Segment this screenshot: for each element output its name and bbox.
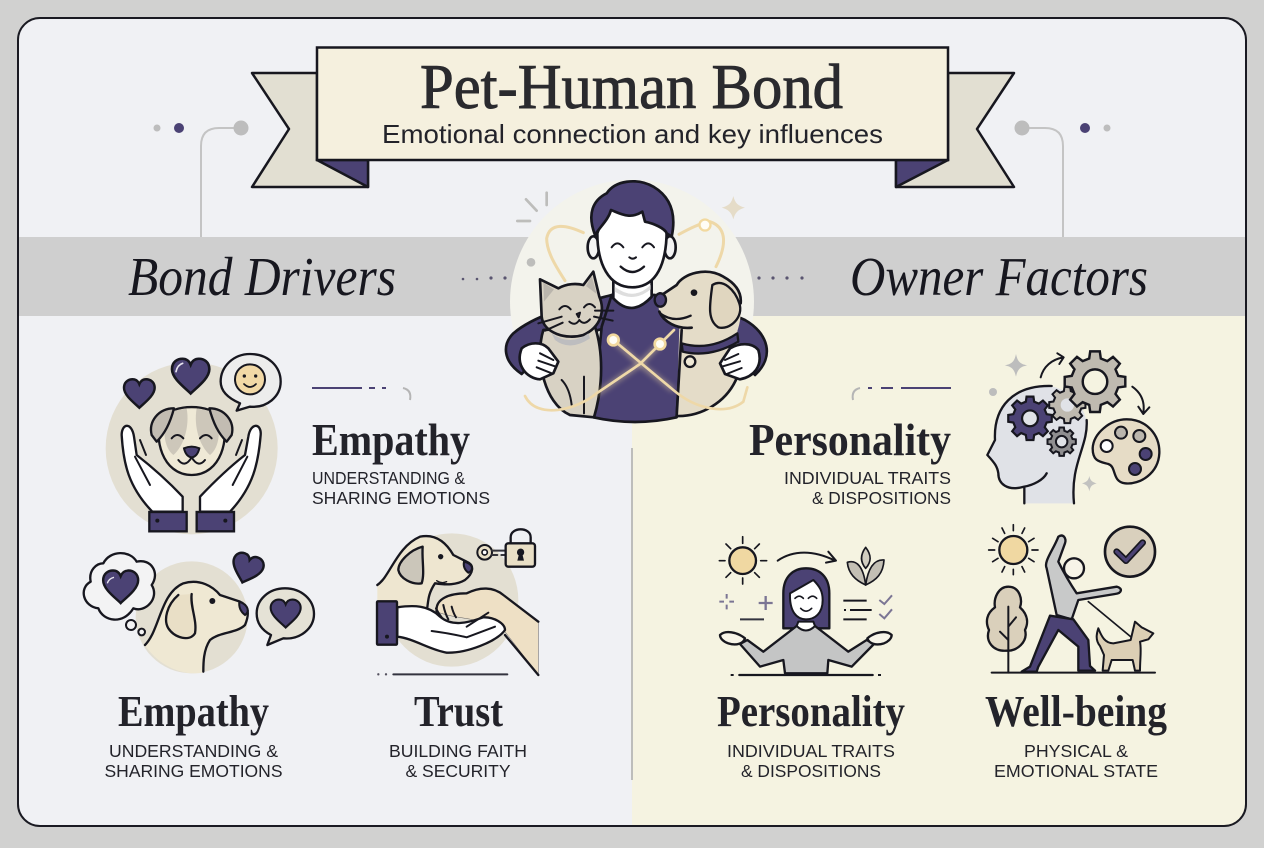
dotted leaders	[462, 276, 804, 280]
heading: Bond Drivers: Bond Drivers	[128, 246, 396, 307]
text: personality top: INDIVIDUAL TRAITS	[784, 468, 951, 488]
icon: well-being person walking dog	[987, 525, 1155, 673]
text: empathy bottom: UNDERSTANDING &	[109, 741, 278, 761]
icon: head with gears and palette	[987, 351, 1159, 503]
icon: woman balancing with sun and plant	[719, 537, 892, 675]
icon: empathy dog in hands	[106, 354, 281, 534]
text: personality top: & DISPOSITIONS	[812, 488, 951, 508]
text: well-being	[985, 687, 1167, 781]
title: Pet-Human Bond	[420, 52, 843, 122]
text: well-being: PHYSICAL &	[1024, 741, 1128, 761]
text: trust: Trust	[414, 687, 503, 736]
text: well-being: EMOTIONAL STATE	[994, 761, 1158, 781]
text: empathy top: SHARING EMOTIONS	[312, 488, 490, 508]
subtitle: Emotional connection and key influences	[382, 119, 883, 149]
ribbon banner	[252, 48, 1014, 187]
text: empathy top: UNDERSTANDING &	[312, 468, 465, 488]
text: trust: BUILDING FAITH	[389, 741, 527, 761]
text: personality top: Personality	[749, 415, 951, 465]
text: empathy bottom	[104, 687, 282, 781]
text: personality bottom: Personality	[717, 687, 905, 736]
connector left	[154, 120, 248, 237]
text: empathy top: Empathy	[312, 415, 470, 465]
heading: Owner Factors: Owner Factors	[850, 246, 1148, 307]
text: personality bottom	[717, 687, 905, 781]
text: empathy bottom: Empathy	[118, 687, 269, 736]
text: empathy top	[312, 415, 490, 508]
text: personality bottom: & DISPOSITIONS	[741, 761, 881, 781]
central illustration: owner hugging cat and dog	[506, 180, 767, 424]
decorative label line: personality top	[853, 388, 951, 400]
decorative label line: empathy top	[312, 388, 410, 400]
text: trust: & SECURITY	[406, 761, 511, 781]
text: trust	[389, 687, 527, 781]
text: well-being: Well-being	[985, 687, 1167, 736]
connector right	[1014, 120, 1110, 237]
icon: trust handshake with dog	[377, 529, 538, 675]
text: empathy bottom: SHARING EMOTIONS	[104, 761, 282, 781]
icon: dog with thought bubbles	[84, 551, 314, 673]
text: personality bottom: INDIVIDUAL TRAITS	[727, 741, 895, 761]
text: personality top	[749, 415, 951, 508]
